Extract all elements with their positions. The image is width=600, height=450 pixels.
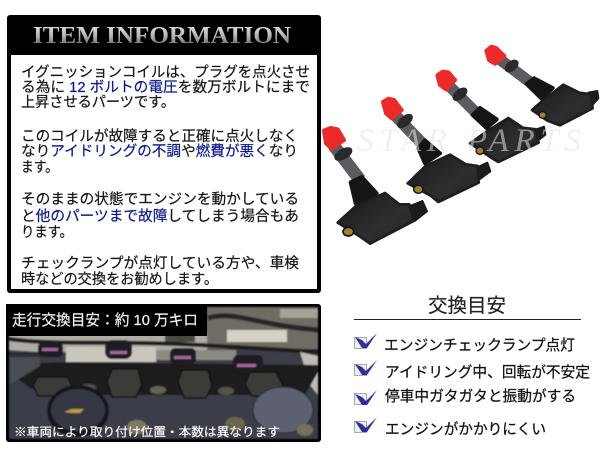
text block: paragraph 1: る為に 12 ボルトの電圧を数万ボルトにまで — [21, 79, 310, 96]
background clutter — [207, 307, 318, 349]
text block: paragraph 2: ます。 — [21, 159, 58, 176]
text block: paragraph 2: なりアイドリングの不調や燃費が悪くなり — [21, 142, 298, 160]
coil 1 — [324, 128, 427, 244]
metal bracket — [66, 347, 156, 362]
label: replacement interval — [6, 304, 207, 336]
round engine cover plug — [253, 387, 313, 433]
text block: paragraph 1: イグニッションコイルは、プラグを点火させ — [21, 64, 310, 81]
text block: paragraph 4: 時などの交換をお勧めします。 — [21, 271, 218, 288]
text block: paragraph 3 — [21, 191, 299, 241]
text block: paragraph 3: そのままの状態でエンジンを動かしている — [21, 191, 299, 208]
checklist item 2 — [354, 360, 590, 381]
text block: paragraph 3: と他のパーツまで故障してしまう場合もあ — [21, 208, 299, 225]
photo panel: engine bay — [6, 304, 321, 442]
watermark: STAR PARTS: STAR PARTS — [357, 123, 581, 159]
note: mounting position varies: ※車両により取り付け位置・本数は異なります — [14, 424, 280, 439]
label: replacement interval: 走行交換目安：約 10 万キロ — [12, 312, 198, 329]
checklist item 2: アイドリング中、回転が不安定 — [385, 364, 590, 381]
checklist item 1: エンジンチェックランプ点灯 — [384, 337, 575, 354]
text block: paragraph 3: ります。 — [21, 224, 73, 241]
panel: item information — [7, 15, 321, 293]
oil filler cap — [47, 385, 109, 437]
text block: paragraph 2: このコイルが故障すると正確に点火しなく — [21, 128, 298, 145]
text block: paragraph 1 — [21, 64, 310, 111]
coil tops — [33, 377, 72, 396]
dark well and sloped cover — [9, 362, 318, 395]
bolts between coils — [80, 384, 96, 392]
text block: paragraph 2 — [21, 128, 298, 176]
coil 2 — [383, 99, 490, 202]
checklist item 1 — [354, 333, 575, 354]
coil 4 — [486, 47, 598, 125]
product photo: four ignition coils — [324, 47, 598, 244]
heading: ITEM INFORMATION: ITEM INFORMATION — [33, 23, 292, 49]
text block: paragraph 4: チェックランプが点灯している方や、車検 — [21, 255, 299, 272]
text block: paragraph 1: 上昇させるパーツです。 — [21, 94, 175, 111]
checklist item 3: 停車中ガタガタと振動がする — [385, 388, 576, 405]
checklist item 4 — [354, 417, 546, 438]
ignition connectors — [38, 340, 263, 370]
heading: replacement guide: 交換目安 — [428, 295, 506, 317]
checklist item 4: エンジンがかかりにくい — [385, 421, 546, 438]
engine photo — [9, 307, 318, 439]
coil 3 — [437, 72, 545, 162]
text block: paragraph 4 — [21, 255, 299, 288]
